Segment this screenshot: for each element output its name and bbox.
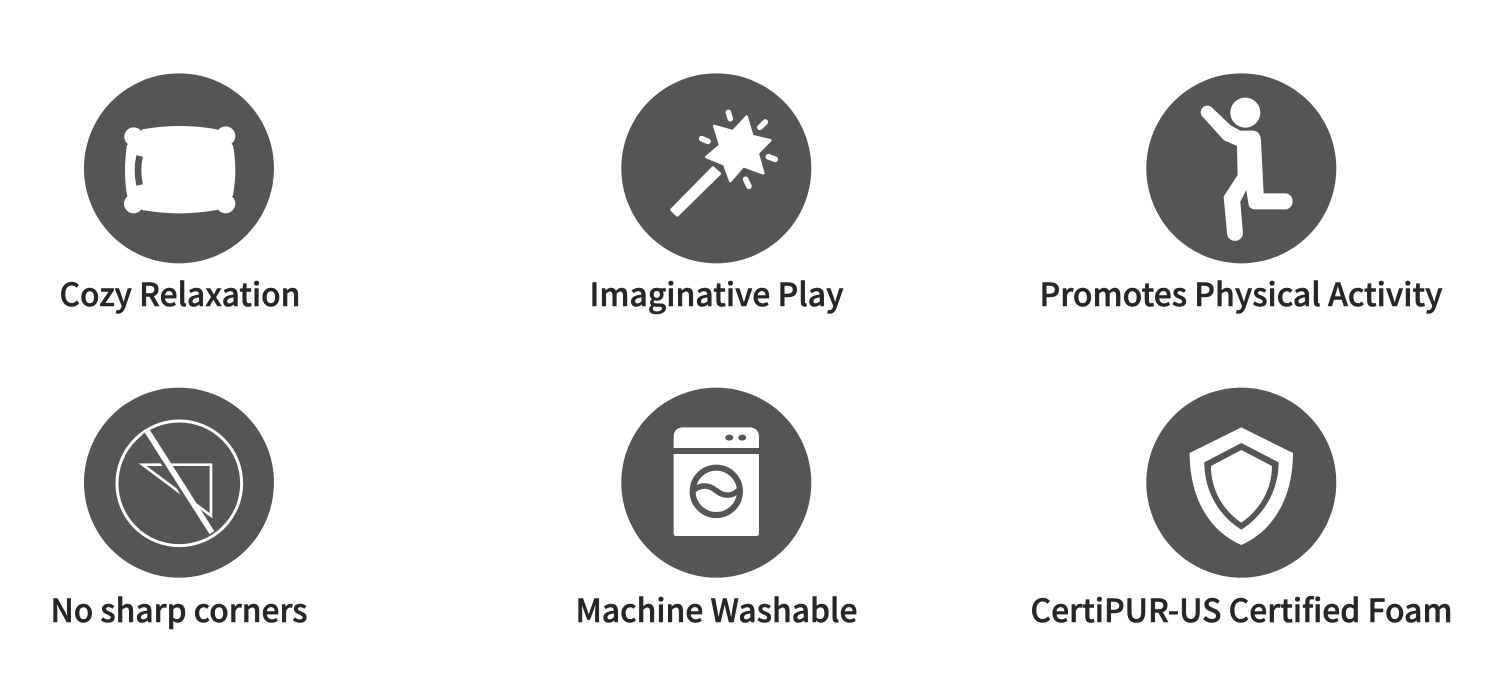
icon: pillow	[84, 73, 274, 263]
label: Imaginative Play: Imaginative Play	[590, 270, 844, 316]
icon: shield	[1146, 388, 1336, 578]
icon: magic wand	[621, 73, 811, 263]
label: Cozy Relaxation: Cozy Relaxation	[60, 270, 300, 316]
label: CertiPUR-US Certified Foam: CertiPUR-US Certified Foam	[1030, 586, 1452, 632]
label: Machine Washable: Machine Washable	[576, 586, 858, 632]
icon: active person	[1146, 73, 1336, 263]
label: No sharp corners: No sharp corners	[50, 586, 308, 632]
label: Promotes Physical Activity: Promotes Physical Activity	[1040, 270, 1442, 316]
icon: no sharp corners	[84, 388, 274, 578]
icon: washing machine	[621, 388, 811, 578]
